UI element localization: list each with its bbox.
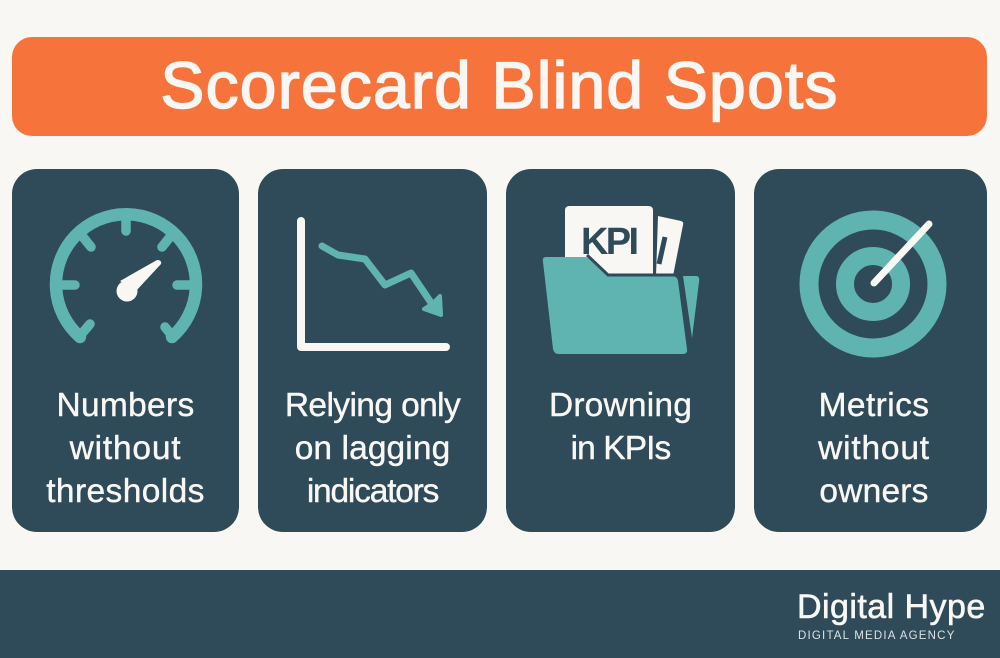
panel: metrics without owners [754, 169, 987, 532]
label: drowning in KPIs: Drowning [549, 387, 692, 424]
footer bar [0, 570, 1000, 658]
label: drowning in KPIs: in KPIs [571, 430, 670, 467]
icon: KPI folder: KPI [581, 221, 639, 263]
label: metrics without owners: without [818, 430, 930, 467]
label: drowning in KPIs [549, 387, 692, 467]
label: numbers without thresholds: without [70, 430, 181, 467]
label: relying only on lagging indicators: indicators [307, 473, 438, 510]
label: relying only on lagging indicators: on lagging [295, 430, 450, 467]
label: relying only on lagging indicators [285, 387, 461, 510]
brand name: Digital Hype [797, 588, 986, 626]
label: numbers without thresholds [46, 387, 205, 510]
label: metrics without owners [818, 387, 930, 510]
label: relying only on lagging indicators: Relying only [285, 387, 460, 424]
brand tagline: DIGITAL MEDIA AGENCY [798, 630, 956, 642]
label: metrics without owners: Metrics [819, 387, 929, 424]
panel: drowning in KPIs [506, 169, 735, 532]
label: numbers without thresholds: Numbers [56, 387, 194, 424]
panel: relying only on lagging indicators [258, 169, 487, 532]
title banner [12, 37, 987, 136]
title: Scorecard Blind Spots [160, 48, 839, 122]
panel: numbers without thresholds [12, 169, 239, 532]
label: metrics without owners: owners [819, 473, 929, 510]
label: numbers without thresholds: thresholds [46, 473, 205, 510]
